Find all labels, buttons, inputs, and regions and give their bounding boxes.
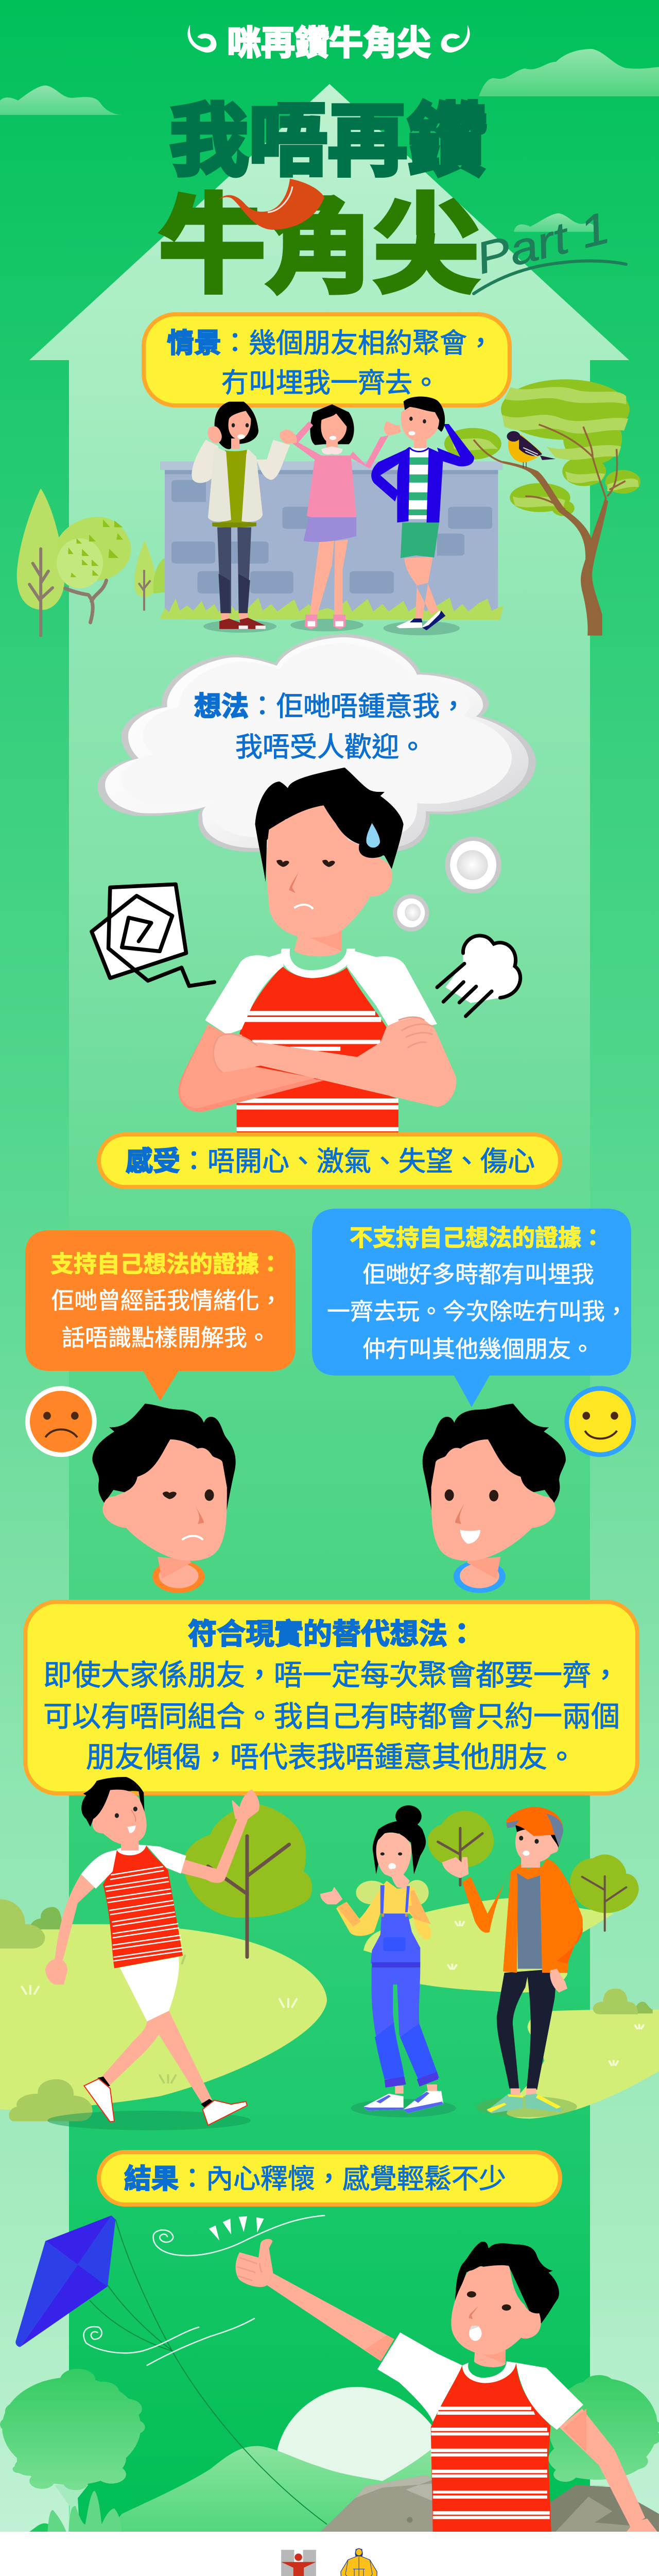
alternative thought line 2: 可以有唔同組合。我自己有時都會只約一兩個 [43, 1700, 620, 1733]
evidence heading: 支持自己想法的證據： [50, 1251, 282, 1277]
sun [278, 2387, 433, 2511]
character: boy in blue jacket [371, 397, 474, 630]
shoes [363, 2091, 443, 2113]
hill: left [0, 1924, 327, 2110]
ankles [395, 2084, 437, 2094]
striped shirt [377, 2332, 583, 2535]
illustration: boy giving a thumbs up [236, 2239, 658, 2535]
tree: tall [17, 488, 64, 636]
top series title with horns [187, 24, 470, 62]
thought bubble: large [445, 837, 501, 893]
trousers [497, 1969, 557, 2090]
evidence body line 1: 佢哋好多時都有叫埋我 [362, 1261, 594, 1287]
legs [101, 2011, 212, 2103]
illustration: wall [160, 461, 504, 620]
evidence body line 3: 仲冇叫其他幾個朋友。 [362, 1336, 594, 1362]
head [373, 1805, 426, 1879]
wind ticks [209, 2216, 264, 2241]
lowered arm [559, 2409, 658, 2532]
head [451, 2242, 559, 2355]
panel: scenario [144, 314, 510, 405]
tree: right [548, 2375, 659, 2511]
heading: line 1: 我唔再鑽 [169, 97, 487, 185]
shoes [487, 2089, 561, 2113]
icon: happy face [564, 1386, 636, 1457]
hill: centre [363, 1898, 614, 1993]
head [255, 768, 404, 938]
evidence body line 2: 一齊去玩。今次除咗冇叫我， [327, 1298, 628, 1325]
illustration: walking boy waving [45, 1777, 259, 2125]
evidence body line 1: 佢哋曾經話我情緒化， [51, 1287, 283, 1314]
head [507, 1807, 563, 1868]
illustration: big tree with bird [444, 379, 640, 636]
kite strings [90, 2219, 327, 2524]
hands [442, 1857, 567, 1992]
illustration: closing landscape [0, 2215, 659, 2535]
tree: right [570, 1854, 639, 1930]
illustration: boy with orange cap [442, 1807, 583, 2113]
thought text line 2: 我唔受人歡迎。 [235, 732, 426, 762]
icon: red horn [218, 179, 324, 230]
tree: round [57, 517, 131, 622]
hills [105, 2446, 433, 2535]
shirt and sleeves [205, 951, 437, 1134]
feelings text: 感受：唔開心、激氣、失望、傷心 [126, 1146, 535, 1177]
panel: feelings [99, 1134, 560, 1187]
icon: bird [507, 431, 556, 467]
bush: right [593, 1989, 653, 2014]
icon: huff of breath [437, 936, 521, 1016]
thought text [194, 691, 467, 762]
illustration: girl in overalls [320, 1805, 443, 2113]
tree: middle [428, 1810, 494, 1885]
evidence heading: 不支持自己想法的證據： [350, 1225, 604, 1251]
alternative thought line 3: 朋友傾偈，唔代表我唔鍾意其他朋友。 [86, 1741, 576, 1773]
ground shadows [203, 619, 460, 635]
panel: realistic alternative thought [25, 1602, 637, 1793]
shoes [84, 2077, 247, 2125]
footer band [0, 2532, 659, 2576]
main title [159, 97, 626, 306]
tree foliage [444, 379, 640, 516]
scenario text line 2: 冇叫埋我一齊去。 [221, 368, 440, 398]
icon: left horn [187, 25, 217, 53]
neck and collar [462, 2348, 516, 2383]
handwritten Part 1 [471, 203, 626, 294]
result text: 結果：內心釋懷，感覺輕鬆不少 [124, 2164, 506, 2194]
tree trunk [474, 425, 626, 636]
character: girl in green shirt [192, 402, 290, 629]
panel: evidence against the thought [312, 1209, 631, 1407]
bush: lower left [9, 2079, 93, 2121]
icon: sad face [25, 1386, 97, 1457]
shorts [120, 1957, 179, 2021]
rocks [317, 2475, 659, 2535]
alternative thought heading: 符合現實的替代想法： [188, 1618, 476, 1650]
scenario text: 情景：幾個朋友相約聚會， [167, 328, 494, 359]
jacket [462, 1859, 583, 1973]
character: girl in pink sweater [280, 404, 402, 629]
logo: golden hands [341, 2549, 377, 2576]
arm down and hand [45, 1874, 95, 1985]
foreground plant [25, 2490, 122, 2535]
grass strip [160, 598, 504, 620]
handwritten Part 1: Part 1 [471, 203, 614, 283]
arm up and hand [181, 1789, 259, 1883]
icon: sweat drop [366, 823, 380, 848]
thought cloud [97, 634, 536, 852]
icon: angry scribble [92, 884, 214, 986]
hands [320, 1869, 410, 1904]
panel: result [99, 2152, 560, 2205]
alternative thought line 1: 即使大家係朋友，唔一定每次聚會都要一齊， [43, 1659, 620, 1691]
thought text: 想法：佢哋唔鍾意我， [194, 691, 467, 722]
icon: right horn [441, 25, 470, 53]
icon: thumbs up hand [236, 2239, 273, 2287]
illustration: three friends [192, 397, 474, 635]
character: doubtful head [92, 1403, 236, 1593]
evidence body line 2: 話唔識點樣開解我。 [62, 1325, 270, 1351]
grass tufts [22, 1922, 644, 2082]
overalls bib [371, 1885, 420, 1968]
hill: right [507, 2010, 659, 2119]
tree: left [0, 2369, 145, 2535]
icon: kite [15, 2215, 115, 2347]
heading: line 2: 牛角尖 [159, 187, 480, 306]
tree: small [134, 540, 165, 611]
illustration: park background [0, 1805, 659, 2130]
bush: upper left [0, 1899, 62, 1948]
head [81, 1777, 147, 1851]
illustration: worried boy with crossed arms [92, 768, 521, 1134]
trousers [372, 1968, 439, 2088]
thought bubble: small [393, 894, 429, 931]
mountain: top left [0, 86, 122, 115]
striped shirt [81, 1845, 186, 1968]
crossed arms [178, 1017, 456, 1112]
raised arm [267, 2274, 394, 2361]
illustration: trees on left [17, 488, 165, 636]
sweater and arms [336, 1881, 431, 1940]
mountain: top right [479, 49, 659, 96]
heading: series title: 咪再鑽牛角尖 [227, 24, 431, 62]
illustration: two faces with emoticons [25, 1386, 636, 1593]
bush behind girl [356, 1880, 429, 1905]
character: smiling head [423, 1403, 566, 1593]
mountain: behind Part 1 [514, 213, 598, 232]
wind lines [84, 2215, 324, 2365]
neck and collar [281, 929, 355, 978]
logo: government department [281, 2550, 316, 2576]
panel: evidence supporting the thought [25, 1230, 296, 1401]
ground shadows [47, 2096, 577, 2130]
tree: large [183, 1805, 312, 1957]
